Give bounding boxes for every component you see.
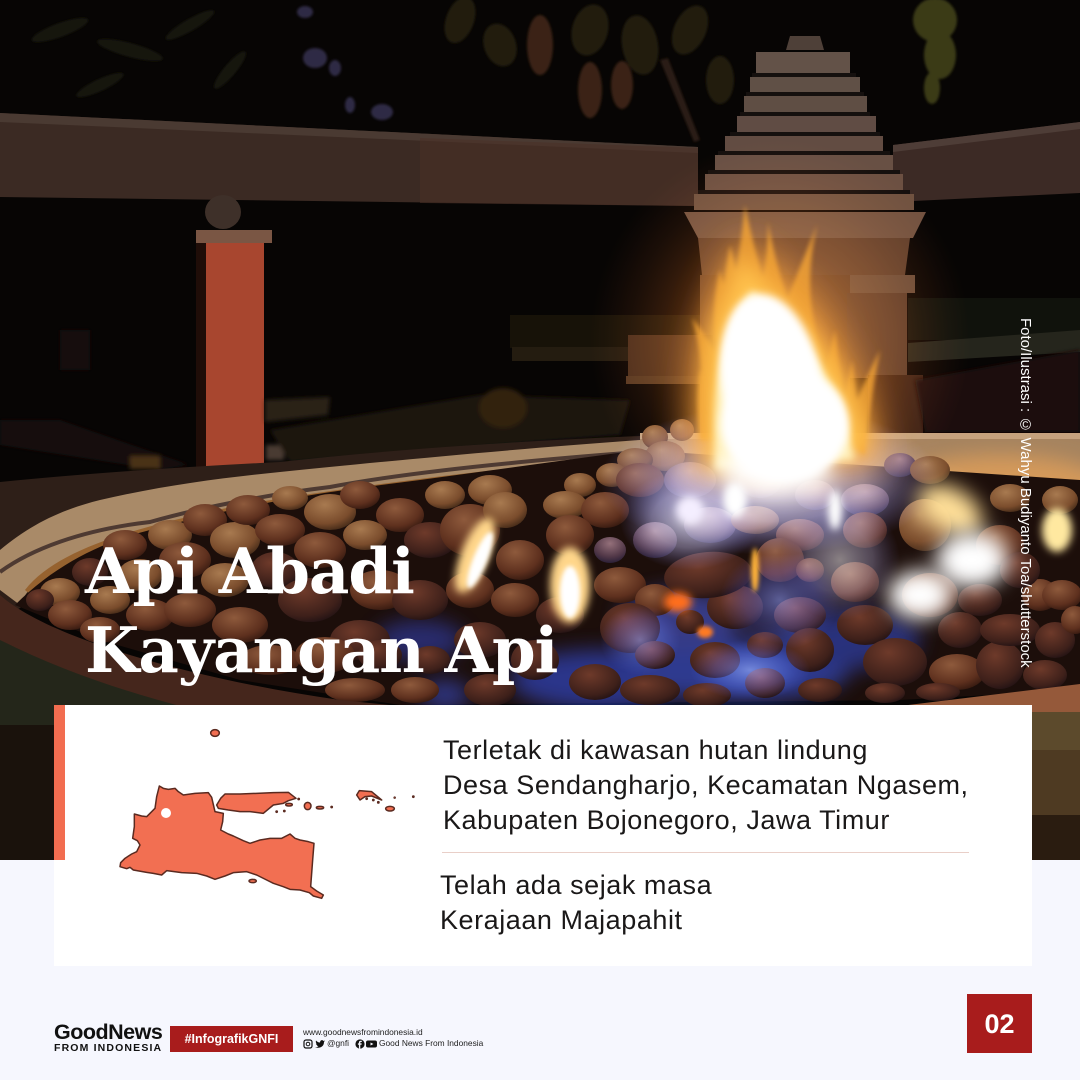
brick pillar: [196, 195, 272, 470]
stone beam right: [893, 122, 1080, 202]
stepped temple tower: [684, 36, 926, 435]
website and social links: Good News From Indonesia: [379, 1038, 483, 1048]
photo: eternal flame among stones: [0, 0, 1080, 860]
location text: Kabupaten Bojonegoro, Jawa Timur: [443, 805, 890, 835]
fence and stone block: [510, 298, 1080, 384]
Madura: [217, 792, 296, 813]
title: Kayangan Api: [85, 613, 557, 687]
icon: twitter: [315, 1040, 325, 1048]
location text: [443, 735, 969, 835]
history text: [440, 870, 712, 935]
Bawean: [211, 730, 219, 736]
basin top rim: [0, 436, 640, 620]
mainland: [120, 786, 323, 898]
icon: instagram: [303, 1039, 313, 1049]
history text: Telah ada sejak masa: [440, 870, 712, 900]
accent bar: [54, 705, 65, 860]
Kangean: [357, 791, 382, 800]
title: [84, 534, 557, 687]
title: Api Abadi: [85, 534, 414, 608]
location text: Terletak di kawasan hutan lindung: [443, 735, 868, 765]
hashtag badge: #InfografikGNFI: [185, 1032, 278, 1046]
page number: 02: [984, 1009, 1015, 1039]
GNFI logo: FROM INDONESIA: [54, 1042, 162, 1054]
left stones: [26, 475, 559, 706]
right wall: [1032, 712, 1080, 860]
paved ground: [0, 725, 54, 860]
orange glow behind flame: [590, 140, 970, 540]
website and social links: @gnfi: [327, 1038, 349, 1048]
hashtag badge: [170, 1026, 293, 1052]
right stones: [536, 419, 1080, 707]
ground left: [0, 330, 1080, 470]
website and social links: www.goodnewsfromindonesia.id: [303, 1027, 423, 1037]
location text: Desa Sendangharjo, Kecamatan Ngasem,: [443, 770, 969, 800]
photo credit: Foto/Ilustrasi : © Wahyu Budiyanto Toa/shutterstock: [1017, 318, 1034, 668]
website and social links: [303, 1027, 484, 1049]
basin wall right: [640, 433, 1080, 525]
stone beam left: [0, 113, 698, 206]
small flames among stones: [447, 473, 1072, 638]
blue glow under stones: [375, 590, 920, 710]
icon: facebook: [355, 1039, 365, 1049]
map of East Java: [119, 728, 415, 900]
main flame: [690, 205, 880, 492]
page number: [967, 994, 1032, 1053]
basin wall left: [0, 440, 640, 605]
foliage: [29, 0, 957, 142]
history text: Kerajaan Majapahit: [440, 905, 683, 935]
basin front rim: [0, 595, 400, 730]
GNFI logo: GoodNews: [54, 1020, 162, 1044]
location marker: [161, 808, 171, 818]
stone bed base: [15, 450, 1080, 705]
grass bank: [0, 640, 180, 750]
small islands: [249, 796, 414, 883]
icon: youtube: [366, 1040, 377, 1048]
info card: [54, 705, 1032, 966]
white-blue haze over upper stones: [600, 405, 940, 700]
